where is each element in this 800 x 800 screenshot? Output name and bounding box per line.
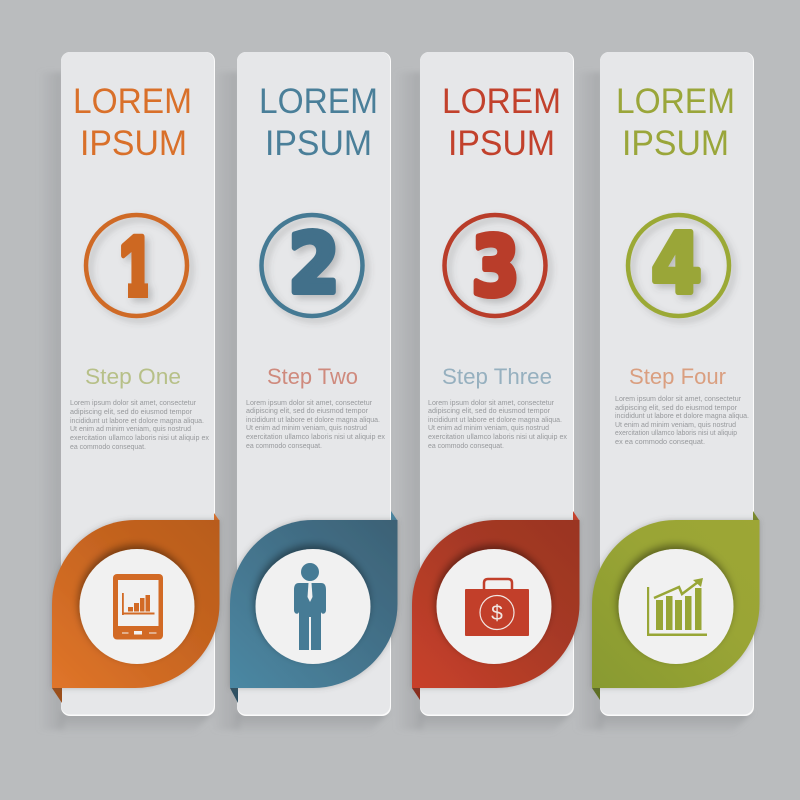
number badge: 1 — [119, 219, 154, 313]
body text: incididunt ut labore et dolore magna aliqua. — [70, 418, 204, 425]
panel: step four — [592, 52, 760, 716]
body text: adipiscing elit, sed do eiusmod tempor — [428, 408, 551, 415]
step label: Step Two — [267, 364, 358, 389]
body text: incididunt ut labore et dolore magna aliqua. — [615, 413, 749, 420]
number badge — [628, 215, 729, 316]
body text: exercitation ullamco laboris nisi ut aliquip — [615, 430, 737, 437]
heading: LOREM — [259, 82, 378, 121]
body text: Lorem ipsum dolor sit amet, consectetur — [428, 400, 555, 407]
body text: Lorem ipsum dolor sit amet, consectetur — [70, 400, 197, 407]
number badge: 4 — [652, 217, 702, 312]
card edge — [237, 52, 391, 716]
leaf ribbon — [592, 520, 760, 688]
card background — [237, 52, 390, 714]
body text: adipiscing elit, sed do eiusmod tempor — [70, 409, 193, 416]
number badge — [444, 215, 546, 316]
number badge: 3 — [472, 220, 520, 315]
card background — [600, 52, 753, 714]
ribbon fold lower — [230, 688, 238, 703]
body text: adipiscing elit, sed do eiusmod tempor — [246, 408, 369, 415]
step label: Step Four — [629, 364, 726, 389]
body text: Ut enim ad minim veniam, quis nostrud — [246, 425, 367, 432]
icon circle — [256, 549, 370, 664]
body text: Ut enim ad minim veniam, quis nostrud — [615, 422, 736, 429]
icon: money briefcase — [465, 579, 529, 636]
body text: ex ea commodo consequat. — [615, 439, 705, 446]
icon: tablet chart — [113, 574, 163, 640]
icon circle — [618, 549, 734, 664]
icon: growth chart — [647, 578, 707, 636]
ribbon fold lower — [412, 688, 420, 700]
card edge — [600, 52, 754, 716]
body text: Ut enim ad minim veniam, quis nostrud — [428, 425, 549, 432]
icon: money briefcase: $ — [491, 602, 503, 625]
card background — [61, 52, 214, 714]
body text: ea commodo consequat. — [246, 443, 322, 450]
body text: exercitation ullamco laboris nisi ut aliquip ex — [70, 435, 210, 442]
body text: Lorem ipsum dolor sit amet, consectetur — [246, 400, 373, 407]
panel: step two — [230, 52, 398, 716]
number badge: 2 — [288, 217, 340, 312]
heading: IPSUM — [622, 124, 729, 163]
panel: step three — [412, 52, 580, 716]
card edge — [61, 52, 215, 716]
body text: adipiscing elit, sed do eiusmod tempor — [615, 405, 738, 412]
body text: Ut enim ad minim veniam, quis nostrud — [70, 426, 191, 433]
leaf ribbon — [52, 520, 220, 688]
ribbon fold lower — [592, 688, 600, 700]
heading: IPSUM — [448, 124, 555, 163]
heading: LOREM — [73, 82, 192, 121]
icon circle — [436, 549, 552, 664]
heading: IPSUM — [265, 124, 372, 163]
body text: exercitation ullamco laboris nisi ut aliquip ex — [246, 434, 386, 441]
ribbon fold — [573, 511, 579, 530]
body text: ea commodo consequat. — [70, 444, 146, 451]
step label: Step Three — [442, 364, 552, 389]
ribbon fold — [753, 511, 759, 530]
heading: IPSUM — [80, 124, 187, 163]
ribbon fold — [391, 511, 397, 530]
body text: Lorem ipsum dolor sit amet, consectetur — [615, 396, 742, 403]
panel: step one — [52, 52, 220, 716]
number badge — [86, 215, 187, 316]
leaf ribbon — [230, 520, 398, 688]
body text: ea commodo consequat. — [428, 443, 504, 450]
icon circle — [80, 549, 194, 664]
ribbon fold — [214, 513, 219, 530]
step label: Step One — [85, 364, 181, 389]
card background — [420, 52, 573, 714]
leaf ribbon — [412, 520, 580, 688]
body text: exercitation ullamco laboris nisi ut aliquip ex — [428, 434, 568, 441]
card shadows — [38, 72, 753, 734]
body text: incididunt ut labore et dolore magna aliqua. — [428, 417, 562, 424]
icon: businessman — [294, 563, 326, 650]
heading: LOREM — [616, 82, 735, 121]
body text: incididunt ut labore et dolore magna aliqua. — [246, 417, 380, 424]
card edge — [420, 52, 574, 716]
number badge — [262, 215, 362, 316]
ribbon fold lower — [52, 688, 62, 703]
heading: LOREM — [442, 82, 561, 121]
